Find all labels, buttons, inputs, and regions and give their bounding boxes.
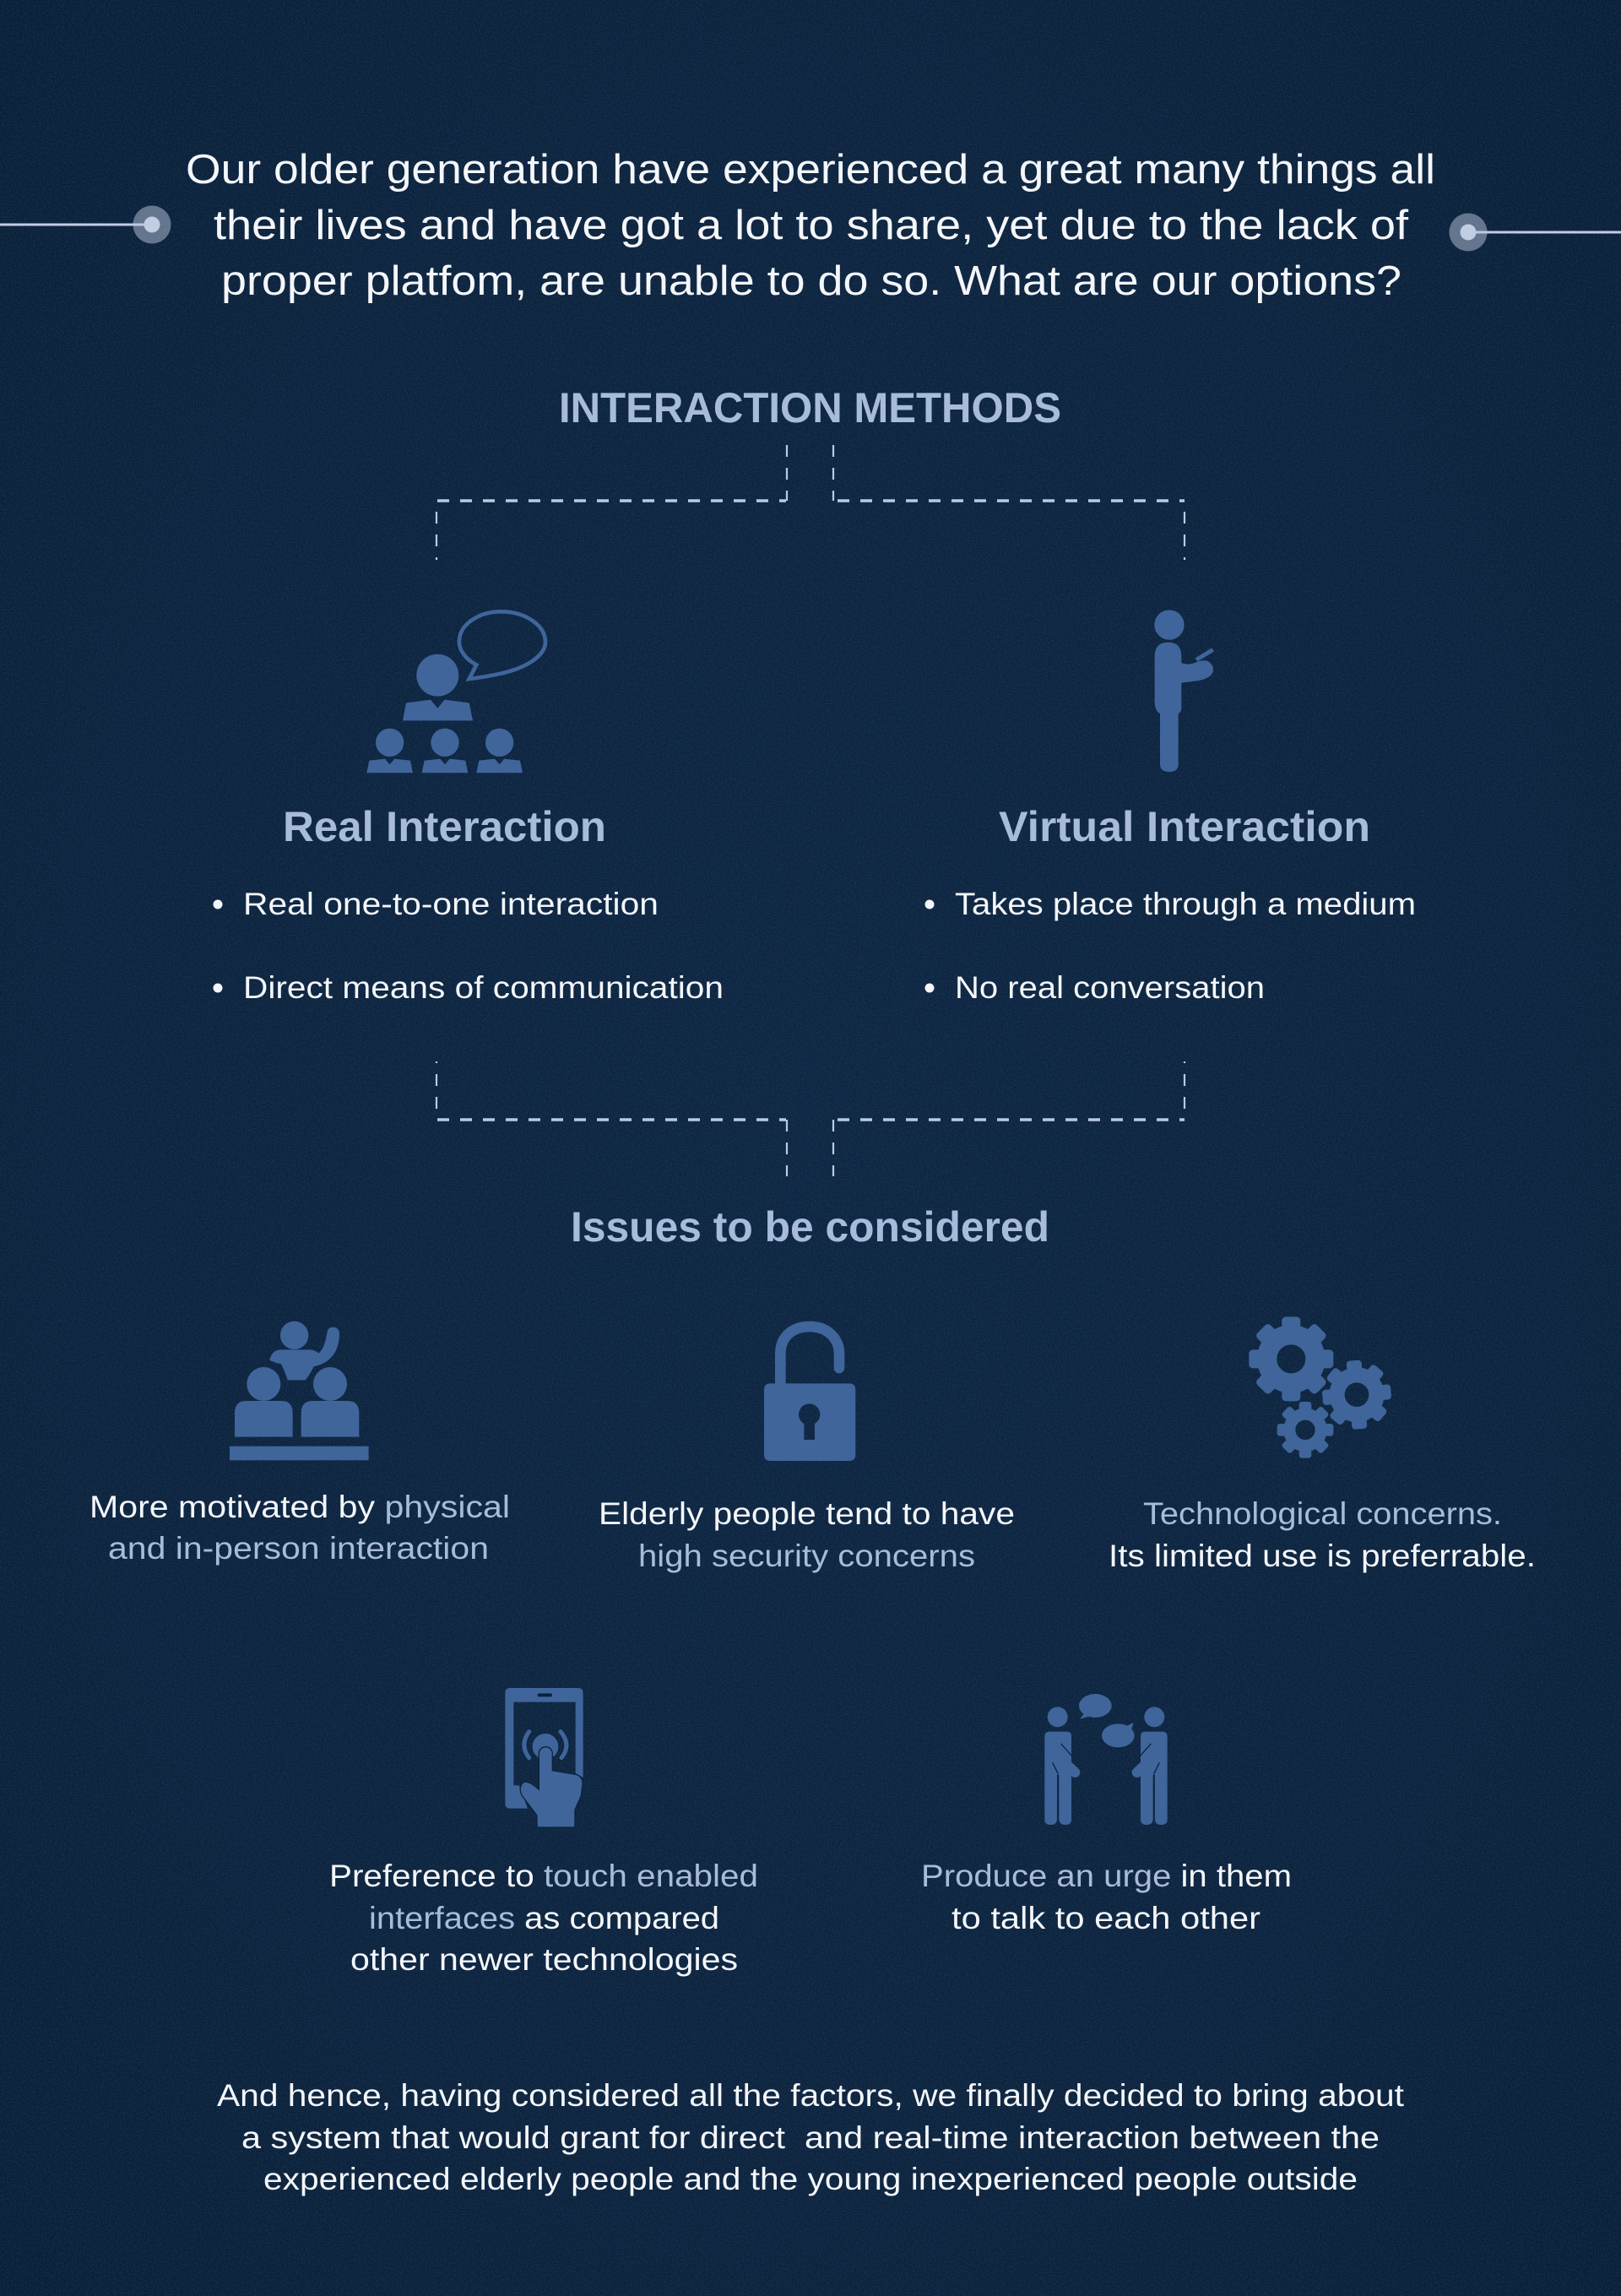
panel: real interaction: [213, 803, 724, 1005]
icon: gears: [1249, 1316, 1394, 1458]
text: urge to talk: [921, 1859, 1292, 1935]
text: urge to talk: to talk to each other: [951, 1901, 1260, 1935]
text: urge to talk: Produce an urge in them: [921, 1859, 1292, 1893]
text: touch interfaces: other newer technologies: [350, 1942, 738, 1977]
left connector line with node: [0, 206, 171, 243]
conclusion text block: [217, 2078, 1405, 2196]
icon: open padlock: [764, 1327, 855, 1461]
conclusion text block: experienced elderly people and the young inexperienced people outside: [263, 2162, 1358, 2196]
bullet list: real interaction: [213, 887, 724, 1005]
heading: interaction methods: INTERACTION METHODS: [559, 384, 1061, 432]
text: security concerns: high security concerns: [638, 1539, 975, 1573]
dashed connector: bottom bracket: [436, 1061, 1185, 1176]
right connector line with node: [1449, 213, 1621, 252]
text: security concerns: [599, 1496, 1015, 1573]
icon: real interaction group with speech bubble: [366, 611, 545, 773]
intro text block: [186, 147, 1435, 304]
bullet list: virtual interaction: Takes place through a medium: [955, 887, 1416, 921]
issue: technological concerns: [1109, 1316, 1536, 1573]
panel: virtual interaction: [925, 803, 1416, 1005]
text: touch interfaces: interfaces as compared: [369, 1901, 719, 1935]
issue: touch interfaces: [329, 1688, 758, 1977]
bullet list: real interaction: Real one-to-one interaction: [243, 887, 659, 921]
text: physical interaction: [89, 1490, 510, 1566]
heading: virtual interaction: Virtual Interaction: [999, 803, 1370, 850]
icon: virtual interaction person with device: [1154, 610, 1213, 772]
bullet list: virtual interaction: [925, 887, 1416, 1005]
conclusion text block: And hence, having considered all the factors, we finally decided to bring about: [217, 2078, 1405, 2113]
issue: physical interaction: [89, 1322, 510, 1566]
text: technological concerns: Its limited use is preferrable.: [1109, 1539, 1536, 1573]
bullet list: virtual interaction: No real conversation: [955, 970, 1265, 1005]
dashed connector: top bracket: [436, 445, 1185, 560]
intro text block: their lives and have got a lot to share, yet due to the lack of: [214, 203, 1408, 248]
icon: audience and speaker: [230, 1322, 369, 1460]
bullet list: real interaction: Direct means of communication: [243, 970, 724, 1005]
intro text block: Our older generation have experienced a great many things all: [186, 147, 1435, 193]
icon: two people talking: [1044, 1694, 1168, 1825]
conclusion text block: a system that would grant for direct and real-time interaction between the: [241, 2120, 1380, 2155]
heading: real interaction: Real Interaction: [283, 803, 606, 850]
text: technological concerns: Technological concerns.: [1143, 1496, 1502, 1531]
text: technological concerns: [1109, 1496, 1536, 1573]
issue: urge to talk: [921, 1694, 1292, 1935]
icon: finger tapping a phone: [505, 1688, 583, 1827]
issue: security concerns: [599, 1327, 1015, 1573]
text: security concerns: Elderly people tend to have: [599, 1496, 1015, 1531]
intro text block: proper platfom, are unable to do so. What are our options?: [221, 258, 1401, 304]
text: physical interaction: and in-person interaction: [108, 1531, 489, 1566]
text: physical interaction: More motivated by physical: [89, 1490, 510, 1524]
text: touch interfaces: Preference to touch enabled: [329, 1859, 758, 1893]
text: touch interfaces: [329, 1859, 758, 1977]
heading: issues to be considered: Issues to be considered: [571, 1203, 1049, 1251]
